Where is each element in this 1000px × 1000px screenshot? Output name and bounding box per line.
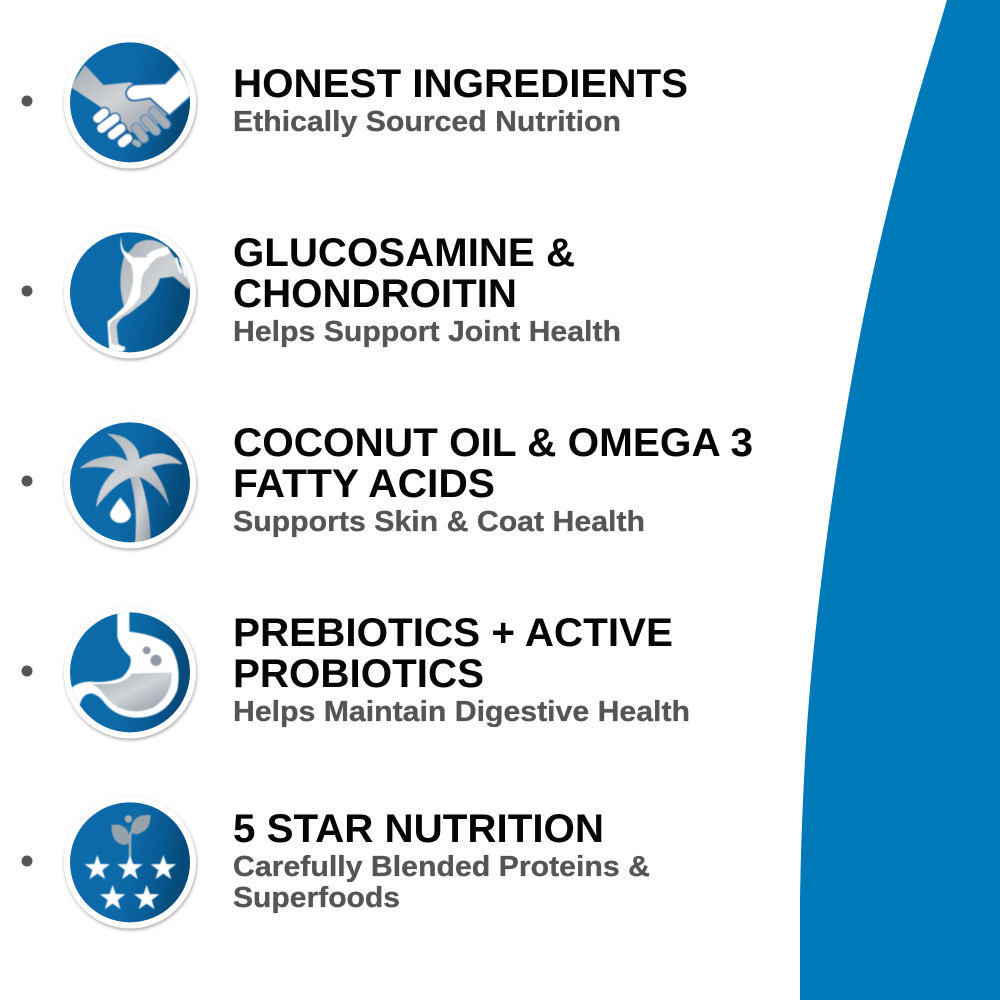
subheading: Carefully Blended Proteins & bbox=[233, 851, 650, 883]
subheading bbox=[233, 851, 650, 914]
subheading: Helps Maintain Digestive Health bbox=[233, 696, 690, 728]
icon: horse leg bbox=[64, 226, 196, 358]
icon: palm tree and oil drop bbox=[64, 416, 196, 548]
heading: GLUCOSAMINE & bbox=[233, 231, 575, 275]
bullet bbox=[22, 856, 32, 866]
row: prebiotics and probiotics bbox=[22, 606, 690, 738]
heading: PREBIOTICS + ACTIVE bbox=[233, 611, 673, 655]
heading bbox=[233, 421, 753, 506]
subheading: Ethically Sourced Nutrition bbox=[233, 106, 621, 138]
heading: PROBIOTICS bbox=[233, 652, 484, 696]
row: glucosamine and chondroitin bbox=[22, 226, 621, 358]
heading: 5 STAR NUTRITION bbox=[233, 807, 604, 851]
icon: handshake bbox=[64, 36, 196, 168]
heading: FATTY ACIDS bbox=[233, 462, 495, 506]
subheading: Supports Skin & Coat Health bbox=[233, 506, 645, 538]
blue curved panel bbox=[800, 0, 1000, 1000]
bullet bbox=[22, 96, 32, 106]
icon: sprout and five stars bbox=[64, 796, 196, 928]
heading: CHONDROITIN bbox=[233, 272, 517, 316]
row: 5 star nutrition bbox=[22, 796, 650, 928]
subheading: Helps Support Joint Health bbox=[233, 316, 621, 348]
subheading: Superfoods bbox=[233, 882, 400, 914]
bullet bbox=[22, 286, 32, 296]
row: coconut oil and omega 3 bbox=[22, 416, 753, 548]
bullet bbox=[22, 476, 32, 486]
heading: HONEST INGREDIENTS bbox=[233, 62, 688, 106]
heading: COCONUT OIL & OMEGA 3 bbox=[233, 421, 753, 465]
icon: stomach bbox=[64, 606, 196, 738]
heading bbox=[233, 611, 673, 696]
bullet bbox=[22, 666, 32, 676]
row: honest ingredients bbox=[22, 36, 688, 168]
heading bbox=[233, 231, 575, 316]
